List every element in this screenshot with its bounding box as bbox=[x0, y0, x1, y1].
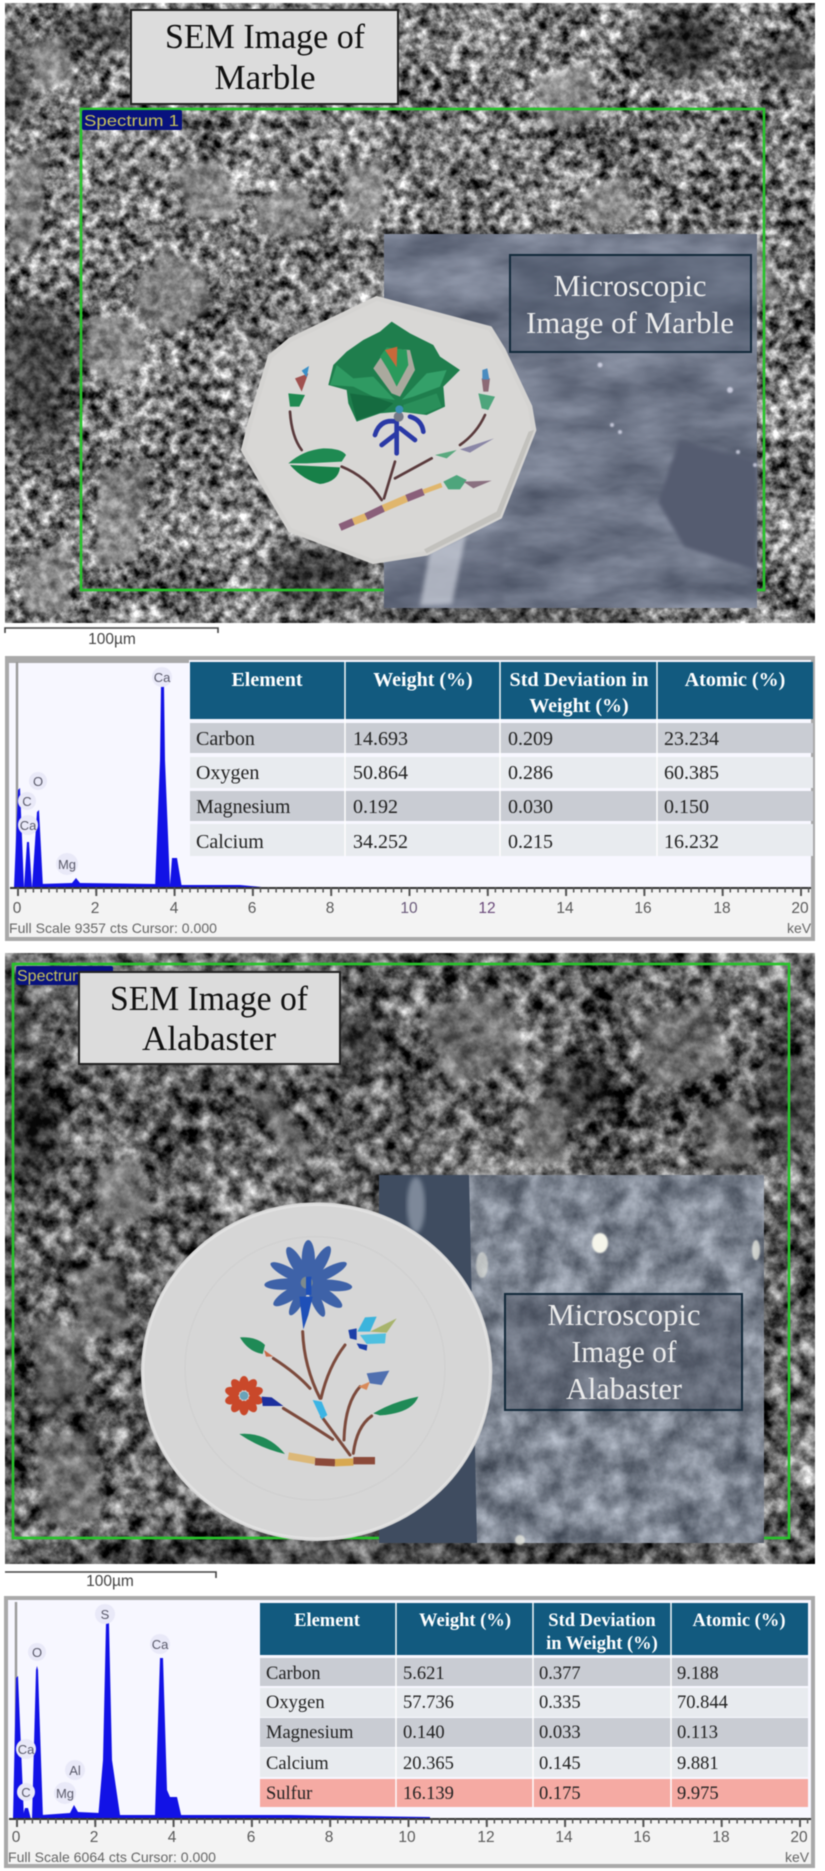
spectrum region outline: alabaster bbox=[13, 964, 789, 1538]
callout: microscopic image of alabaster bbox=[505, 1294, 742, 1410]
SEM grain texture: marble bbox=[5, 3, 815, 623]
footer readout: alabaster: Full Scale 6064 cts Cursor: 0.000 bbox=[8, 1849, 216, 1865]
base bbox=[288, 1456, 375, 1463]
peak labels: alabaster bbox=[16, 1604, 170, 1804]
energy axis: alabaster: 4 bbox=[168, 1829, 177, 1846]
callout: microscopic image of marble: Image of Marble bbox=[526, 305, 734, 340]
callout: microscopic image of alabaster: Microscopic bbox=[548, 1297, 700, 1332]
callout: microscopic image of alabaster: Image of bbox=[572, 1334, 677, 1369]
energy axis: marble: 10 bbox=[400, 900, 418, 917]
table: alabaster composition: Calcium bbox=[266, 1754, 329, 1774]
energy axis: alabaster: 16 bbox=[633, 1829, 651, 1846]
table: alabaster composition: 0.145 bbox=[539, 1754, 581, 1774]
energy axis: marble: 20 bbox=[791, 900, 809, 917]
table: marble composition: Calcium bbox=[196, 831, 264, 853]
heading: SEM image of alabaster: SEM Image of bbox=[110, 979, 308, 1018]
table: marble composition: Weight (%) bbox=[529, 695, 629, 717]
microscopic image of alabaster bbox=[379, 1175, 764, 1545]
peak labels: marble: Ca bbox=[20, 818, 37, 833]
table: marble composition: 0.209 bbox=[508, 728, 553, 750]
spectrum label: marble bbox=[82, 110, 182, 130]
table: alabaster composition: Magnesium bbox=[266, 1723, 354, 1743]
microscopic image of marble bbox=[384, 234, 757, 608]
table: marble composition: 0.286 bbox=[508, 762, 553, 784]
table: alabaster composition: Element bbox=[294, 1611, 361, 1631]
table: marble composition: Element bbox=[231, 669, 303, 691]
energy axis: alabaster: 14 bbox=[555, 1829, 573, 1846]
energy axis: alabaster: 20 bbox=[790, 1829, 808, 1846]
heading: SEM image of alabaster bbox=[79, 972, 340, 1064]
energy axis: marble bbox=[10, 888, 811, 917]
scale bar: alabaster bbox=[5, 1572, 216, 1590]
table: marble composition: 16.232 bbox=[664, 831, 719, 853]
energy axis: marble: 18 bbox=[713, 900, 731, 917]
alabaster inlay plate with flower bbox=[141, 1202, 492, 1541]
spectrum label: alabaster bbox=[16, 966, 113, 985]
peak labels: marble: Mg bbox=[58, 857, 76, 872]
panel: marble EDS spectrum and table bbox=[7, 658, 813, 939]
turquoise flower bbox=[357, 1317, 377, 1332]
footer readout: alabaster bbox=[8, 1849, 810, 1865]
table: marble composition: Oxygen bbox=[196, 762, 259, 784]
table: alabaster composition: 70.844 bbox=[677, 1693, 728, 1713]
table: alabaster composition: 9.881 bbox=[677, 1754, 719, 1774]
table: marble composition: Std Deviation in bbox=[510, 669, 648, 691]
energy axis: alabaster: 6 bbox=[247, 1829, 255, 1846]
table: alabaster composition: Weight (%) bbox=[419, 1611, 511, 1631]
energy axis: marble: 2 bbox=[91, 900, 99, 917]
marble inlay plaque with flower bbox=[243, 298, 534, 562]
energy axis: marble: 4 bbox=[170, 900, 179, 917]
stems bbox=[290, 412, 485, 500]
table: marble composition: 50.864 bbox=[353, 762, 408, 784]
energy axis: marble: 6 bbox=[248, 900, 256, 917]
table: alabaster composition: 9.975 bbox=[677, 1784, 719, 1804]
small side buds bbox=[443, 475, 467, 489]
blue sepals bbox=[375, 417, 423, 453]
energy axis: alabaster: 10 bbox=[398, 1829, 416, 1846]
shadow blotches: marble bbox=[0, 10, 820, 625]
callout: microscopic image of marble: Microscopic bbox=[554, 268, 706, 303]
callout: microscopic image of alabaster: Alabaster bbox=[566, 1371, 683, 1406]
table: alabaster composition: 0.113 bbox=[677, 1723, 718, 1743]
rose blossom bbox=[328, 322, 460, 422]
spectrum frame: alabaster bbox=[6, 1598, 813, 1866]
panel: marble SEM image bbox=[0, 3, 820, 625]
table: marble composition: 23.234 bbox=[664, 728, 719, 750]
rock fragments: alabaster bbox=[30, 990, 760, 1525]
energy axis: alabaster: 12 bbox=[477, 1829, 495, 1846]
callout: microscopic image of marble bbox=[510, 255, 751, 352]
heading: SEM image of alabaster: Alabaster bbox=[142, 1019, 276, 1058]
panel: alabaster EDS spectrum and table bbox=[6, 1598, 813, 1866]
spectrum frame: marble bbox=[7, 658, 813, 939]
peak labels: marble: Ca bbox=[154, 670, 171, 685]
peak labels: alabaster: Al bbox=[69, 1763, 81, 1778]
trunk bbox=[340, 485, 442, 527]
table: alabaster composition: Std Deviation bbox=[548, 1611, 656, 1631]
energy axis: marble: 14 bbox=[556, 900, 574, 917]
energy axis: alabaster bbox=[9, 1819, 811, 1846]
peak labels: alabaster: O bbox=[32, 1645, 42, 1660]
table: marble composition: 34.252 bbox=[353, 831, 408, 853]
panel: alabaster SEM image bbox=[0, 953, 815, 1565]
footer readout: alabaster: keV bbox=[785, 1849, 810, 1865]
leaf bbox=[288, 448, 346, 463]
energy axis: marble: 16 bbox=[634, 900, 652, 917]
table: alabaster composition: Carbon bbox=[266, 1664, 320, 1684]
table: alabaster composition: 0.175 bbox=[539, 1784, 581, 1804]
peak labels: alabaster: S bbox=[101, 1607, 110, 1622]
leaves bbox=[240, 1337, 265, 1354]
table: marble composition: 0.192 bbox=[353, 796, 398, 818]
table: marble composition: Weight (%) bbox=[373, 669, 473, 691]
footer readout: marble bbox=[9, 920, 812, 936]
peak labels: marble bbox=[18, 667, 172, 875]
table: marble composition: Magnesium bbox=[196, 796, 291, 818]
peak labels: alabaster: Mg bbox=[56, 1786, 74, 1801]
table: alabaster composition: 0.335 bbox=[539, 1693, 581, 1713]
SEM grain texture: alabaster bbox=[5, 953, 815, 1564]
spectrum peaks: alabaster bbox=[13, 1623, 430, 1819]
rock fragments: marble bbox=[10, 35, 780, 615]
table: marble composition: 60.385 bbox=[664, 762, 719, 784]
table: alabaster composition: in Weight (%) bbox=[546, 1634, 658, 1654]
table: alabaster composition: 9.188 bbox=[677, 1664, 719, 1684]
table: marble composition: 0.030 bbox=[508, 796, 553, 818]
peak labels: marble: O bbox=[33, 774, 43, 789]
table: alabaster composition: 16.139 bbox=[403, 1784, 454, 1804]
footer readout: marble: keV bbox=[787, 920, 812, 936]
spectrum label: marble: Spectrum 1 bbox=[84, 113, 179, 130]
table: alabaster composition bbox=[260, 1603, 808, 1807]
energy axis: alabaster: 8 bbox=[325, 1829, 333, 1846]
energy axis: alabaster: 0 bbox=[12, 1829, 21, 1846]
energy axis: marble: 0 bbox=[13, 900, 22, 917]
scale bar: marble bbox=[5, 628, 218, 648]
peak labels: alabaster: Ca bbox=[152, 1637, 169, 1652]
heading: SEM image of marble bbox=[131, 10, 398, 104]
scale bar: alabaster: 100µm bbox=[86, 1573, 134, 1590]
energy axis: alabaster: 18 bbox=[712, 1829, 730, 1846]
orange flower bbox=[224, 1376, 264, 1415]
peak labels: alabaster: C bbox=[21, 1785, 31, 1800]
spectrum peaks: marble bbox=[14, 685, 300, 888]
table: alabaster composition: 0.140 bbox=[403, 1723, 445, 1743]
table: alabaster composition: 0.377 bbox=[539, 1664, 581, 1684]
heading: SEM image of marble: Marble bbox=[214, 58, 316, 97]
table: alabaster composition: 20.365 bbox=[403, 1754, 454, 1774]
blue blossom bbox=[264, 1240, 353, 1319]
table: alabaster composition: Sulfur bbox=[266, 1784, 312, 1804]
table: marble composition: Carbon bbox=[196, 728, 255, 750]
spectrum label: alabaster: Spectrum bbox=[17, 968, 85, 985]
footer readout: marble: Full Scale 9357 cts Cursor: 0.000 bbox=[9, 920, 217, 936]
right bud bbox=[478, 393, 495, 410]
table: alabaster composition: Oxygen bbox=[266, 1693, 325, 1713]
peak labels: marble: C bbox=[22, 794, 32, 809]
table: marble composition: Atomic (%) bbox=[685, 669, 785, 691]
shadow blotches: alabaster bbox=[0, 990, 815, 1565]
energy axis: marble: 8 bbox=[326, 900, 334, 917]
table: alabaster composition: 5.621 bbox=[403, 1664, 445, 1684]
table: alabaster composition: Atomic (%) bbox=[693, 1611, 785, 1631]
stems bbox=[273, 1332, 372, 1455]
spectrum region outline: marble bbox=[81, 109, 764, 590]
table: alabaster composition: 0.033 bbox=[539, 1723, 581, 1743]
table: marble composition: 14.693 bbox=[353, 728, 408, 750]
energy axis: alabaster: 2 bbox=[90, 1829, 98, 1846]
left bud bbox=[288, 393, 305, 407]
table: marble composition: 0.150 bbox=[664, 796, 709, 818]
heading: SEM image of marble: SEM Image of bbox=[165, 17, 365, 56]
energy axis: marble: 12 bbox=[478, 900, 496, 917]
table: marble composition: 0.215 bbox=[508, 831, 553, 853]
table: alabaster composition: 57.736 bbox=[403, 1693, 454, 1713]
peak labels: alabaster: Ca bbox=[18, 1742, 35, 1757]
scale bar: marble: 100µm bbox=[88, 631, 136, 648]
table: marble composition bbox=[190, 662, 813, 856]
